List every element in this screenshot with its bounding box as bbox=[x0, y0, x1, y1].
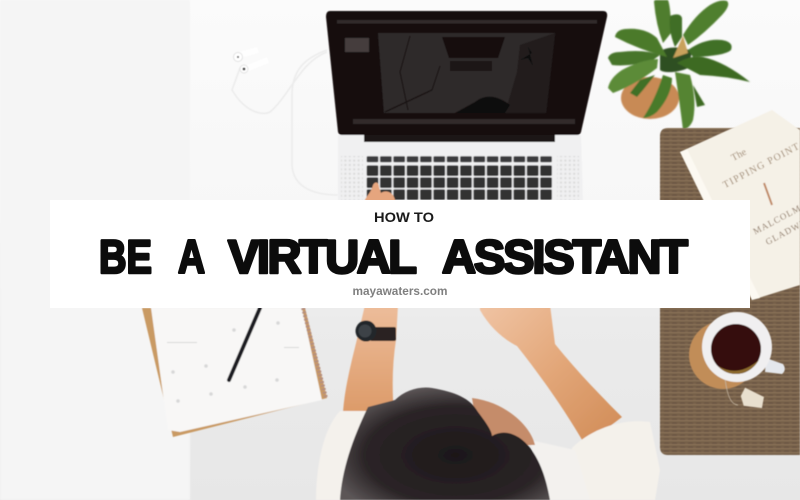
right arm bbox=[480, 305, 622, 445]
kicker: how to: HOW TO bbox=[374, 209, 434, 225]
laptop base bbox=[338, 135, 583, 205]
right shirt sleeve bbox=[560, 421, 660, 500]
banner bbox=[50, 200, 750, 308]
title: VIRTUAL bbox=[228, 230, 417, 283]
person at desk bbox=[316, 305, 660, 500]
laptop hinge bbox=[364, 135, 555, 142]
fingers on keyboard bbox=[364, 183, 396, 202]
calendar dots bbox=[167, 321, 299, 403]
title: ASSISTANT bbox=[442, 230, 688, 283]
cup handle bbox=[765, 358, 785, 374]
title bbox=[99, 230, 688, 283]
book: The Tipping Point: The bbox=[730, 147, 749, 164]
spiral binding bbox=[303, 308, 326, 398]
plant pot bbox=[621, 77, 679, 119]
laptop bbox=[326, 11, 607, 205]
book: The Tipping Point bbox=[680, 110, 800, 300]
hair bbox=[340, 388, 550, 500]
plant bbox=[608, 0, 750, 130]
speaker grills bbox=[341, 156, 579, 200]
laptop screen bbox=[326, 11, 607, 135]
plant centre bbox=[673, 36, 688, 58]
title: A bbox=[178, 230, 205, 283]
placemat bbox=[660, 128, 800, 455]
coaster bbox=[689, 321, 757, 389]
left shirt sleeve bbox=[316, 411, 395, 500]
forehead skin bbox=[472, 398, 535, 445]
plant leaves bbox=[608, 0, 750, 130]
notebook bbox=[142, 308, 327, 437]
coffee bbox=[711, 324, 761, 374]
title: BE bbox=[99, 230, 152, 283]
tea tag bbox=[725, 378, 765, 410]
book: The Tipping Point: TIPPING POINT bbox=[721, 141, 800, 191]
icon: earphones and cable bbox=[232, 50, 338, 195]
website: mayawaters.com bbox=[352, 284, 448, 298]
screen content bbox=[337, 20, 597, 124]
cup bbox=[702, 312, 772, 382]
pen bbox=[229, 308, 260, 380]
keyboard bbox=[366, 156, 553, 202]
banner panel bbox=[50, 200, 750, 308]
coffee cup on coaster bbox=[689, 312, 785, 410]
watch bbox=[356, 320, 396, 342]
left arm bbox=[343, 305, 398, 415]
